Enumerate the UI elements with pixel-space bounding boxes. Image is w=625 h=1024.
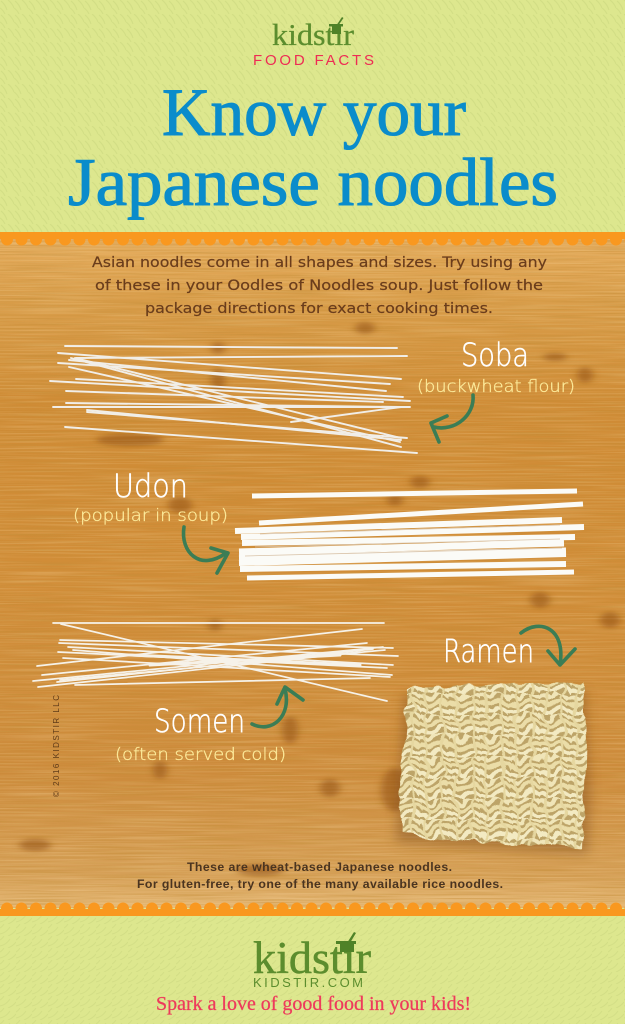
website: KIDSTIR.COM (253, 975, 363, 990)
title: Japanese noodles (68, 144, 558, 220)
udon label (73, 467, 228, 526)
arrow: somen (252, 687, 303, 727)
soba label: Soba (461, 336, 529, 374)
top green header background (0, 0, 625, 234)
intro text (92, 255, 547, 317)
bottom green footer background (0, 915, 625, 1024)
icon: pot (329, 17, 344, 34)
somen noodles (33, 623, 398, 701)
top orange scalloped border (0, 232, 625, 246)
tagline: Spark a love of good food in your kids! (156, 993, 471, 1015)
wood board background (0, 236, 625, 908)
title: Know your (162, 74, 466, 150)
bottom note: For gluten-free, try one of the many available rice noodles. (137, 877, 503, 891)
soba label: (buckwheat flour) (417, 377, 575, 397)
food facts label: FOOD FACTS (253, 52, 374, 69)
top logo: kidstir: kidstir (272, 17, 355, 52)
ramen noodle block (396, 682, 590, 854)
intro text: Asian noodles come in all shapes and sizes. Try using any (92, 255, 547, 271)
intro text: package directions for exact cooking times. (145, 301, 493, 317)
intro text: of these in your Oodles of Noodles soup. Just follow the (95, 278, 543, 294)
ramen label: Ramen (443, 632, 534, 670)
udon label: (popular in soup) (73, 506, 228, 526)
soba noodles (50, 346, 417, 453)
copyright: © 2016 KIDSTIR LLC (52, 695, 61, 797)
arrow: udon (183, 527, 228, 573)
somen label: (often served cold) (115, 745, 286, 765)
title (68, 74, 558, 220)
arrow: soba (431, 395, 473, 442)
bottom note: These are wheat-based Japanese noodles. (187, 860, 452, 874)
somen label: Somen (154, 702, 245, 740)
bottom orange scalloped border (0, 902, 625, 916)
soba label (417, 336, 575, 397)
bottom logo: kidstir: kidstir (253, 933, 371, 983)
somen label (115, 702, 286, 765)
udon label: Udon (113, 467, 188, 505)
bottom note (137, 860, 503, 891)
arrow: ramen (521, 626, 575, 665)
udon noodles (235, 491, 584, 578)
icon: pot (336, 932, 356, 952)
